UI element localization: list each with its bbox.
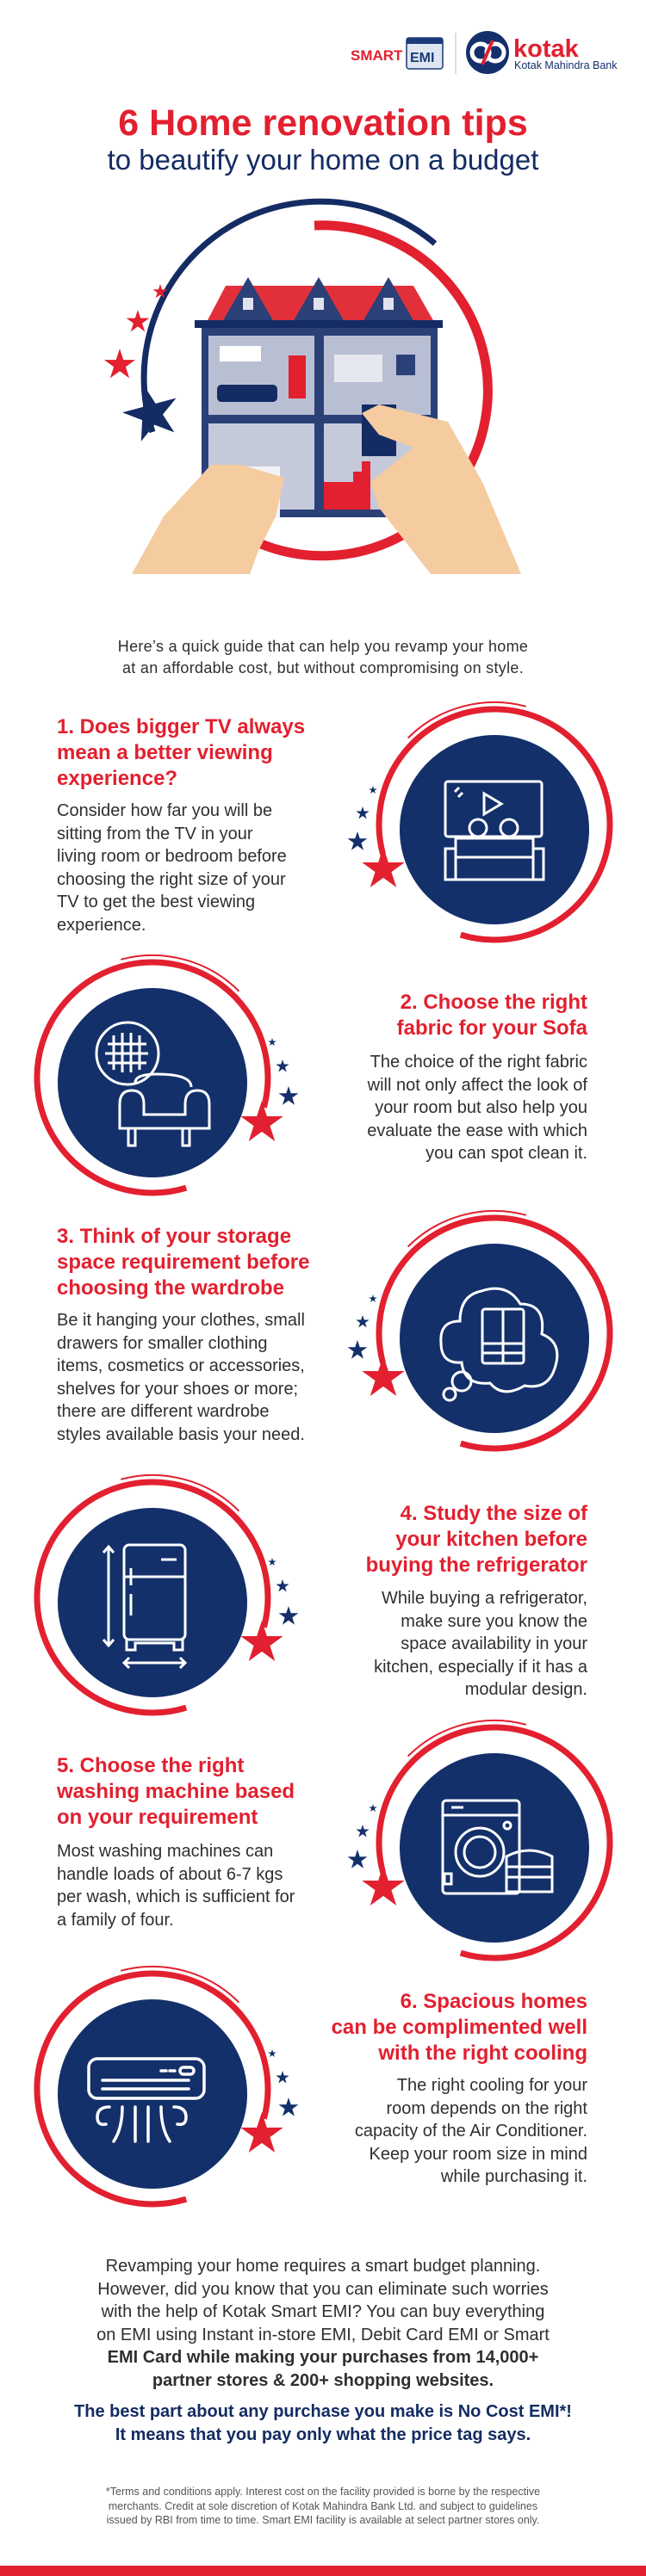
body 6: Keep your room size in mind (370, 2145, 587, 2164)
heading 4: 4. Study the size of (401, 1502, 587, 1525)
body 6 (355, 2076, 587, 2186)
heading 6: 6. Spacious homes (401, 1990, 587, 2013)
no cost emi callout: It means that you pay only what the price tag says. (115, 2425, 531, 2444)
icon 6: air conditioner (37, 1967, 298, 2204)
body 3: styles available basis your need. (57, 1425, 305, 1444)
body 2: your room but also help you (375, 1098, 587, 1117)
body 6: room depends on the right (386, 2099, 587, 2118)
heading 3 (57, 1225, 309, 1300)
intro text: at an affordable cost, but without compromising on style. (122, 659, 524, 676)
body 3: there are different wardrobe (57, 1402, 269, 1421)
body 1 (57, 801, 287, 935)
icon 4: refrigerator (37, 1475, 298, 1713)
body 1: TV to get the best viewing (57, 893, 255, 911)
body 4: space availability in your (401, 1634, 587, 1653)
body 4: modular design. (465, 1680, 587, 1699)
heading 1 (57, 715, 305, 790)
body 3: items, cosmetics or accessories, (57, 1356, 305, 1375)
logo: kotak mahindra bank: kotak (513, 35, 580, 63)
heading 5: 5. Choose the right (57, 1754, 244, 1777)
icon 5: washing machine (348, 1720, 610, 1958)
no cost emi callout (74, 2402, 572, 2444)
body 1: experience. (57, 916, 146, 935)
title: 6 Home renovation tips (118, 102, 528, 144)
body 2 (367, 1053, 587, 1163)
closing paragraph: Revamping your home requires a smart budget planning. (106, 2257, 540, 2276)
body 1: Consider how far you will be (57, 801, 272, 820)
body 3 (57, 1311, 305, 1444)
hero illustration: house with hands (104, 201, 521, 574)
body 2: The choice of the right fabric (370, 1053, 587, 1072)
bottom red bar (0, 2566, 646, 2576)
heading 4: buying the refrigerator (366, 1554, 587, 1577)
logo: kotak mahindra bank: Kotak Mahindra Bank (514, 59, 618, 71)
body 5: a family of four. (57, 1911, 174, 1930)
logo: smart emi: SMART (351, 47, 403, 64)
closing paragraph: However, did you know that you can eliminate such worries (97, 2279, 549, 2298)
heading 4 (366, 1502, 587, 1577)
intro text: Here’s a quick guide that can help you revamp your home (118, 638, 528, 655)
logo: kotak mahindra bank (456, 31, 618, 74)
body 5: handle loads of about 6-7 kgs (57, 1865, 283, 1884)
heading 2 (397, 991, 587, 1040)
closing paragraph: partner stores & 200+ shopping websites. (152, 2370, 494, 2389)
disclaimer (106, 2486, 540, 2526)
body 3: drawers for smaller clothing (57, 1334, 268, 1353)
body 2: will not only affect the look of (368, 1076, 587, 1095)
heading 5: washing machine based (57, 1780, 295, 1803)
heading 1: 1. Does bigger TV always (57, 715, 305, 738)
icon 2: sofa fabric (37, 955, 298, 1193)
closing paragraph (96, 2257, 550, 2389)
heading 3: space requirement before (57, 1251, 309, 1274)
heading 3: choosing the wardrobe (57, 1276, 284, 1300)
logo: smart emi (351, 38, 443, 69)
body 5: Most washing machines can (57, 1842, 273, 1861)
disclaimer: issued by RBI from time to time. Smart EMI facility is available at select partner stores only. (107, 2514, 539, 2526)
icon 3: wardrobe thought cloud (348, 1211, 610, 1449)
body 4 (374, 1589, 587, 1699)
title: to beautify your home on a budget (108, 144, 538, 176)
heading 4: your kitchen before (395, 1528, 587, 1551)
title (108, 102, 539, 176)
closing paragraph: EMI Card while making your purchases from 14,000+ (108, 2348, 538, 2367)
body 2: you can spot clean it. (425, 1144, 587, 1163)
heading 5 (57, 1754, 295, 1829)
heading 2: fabric for your Sofa (397, 1016, 587, 1040)
no cost emi callout: The best part about any purchase you make is No Cost EMI*! (74, 2402, 572, 2421)
body 1: living room or bedroom before (57, 847, 287, 866)
body 1: sitting from the TV in your (57, 825, 253, 843)
heading 6: can be complimented well (332, 2016, 587, 2039)
body 6: while purchasing it. (441, 2167, 587, 2186)
disclaimer: merchants. Credit at sole discretion of Kotak Mahindra Bank Ltd. and subject to guidelines (109, 2499, 537, 2511)
body 4: make sure you know the (401, 1612, 587, 1631)
body 4: kitchen, especially if it has a (374, 1658, 587, 1677)
body 3: Be it hanging your clothes, small (57, 1311, 305, 1330)
heading 1: experience? (57, 767, 177, 790)
heading 3: 3. Think of your storage (57, 1225, 291, 1248)
heading 6 (332, 1990, 587, 2065)
heading 1: mean a better viewing (57, 741, 273, 764)
heading 6: with the right cooling (378, 2042, 587, 2065)
body 3: shelves for your shoes or more; (57, 1380, 298, 1399)
body 6: capacity of the Air Conditioner. (355, 2122, 587, 2140)
closing paragraph: on EMI using Instant in-store EMI, Debit Card EMI or Smart (96, 2326, 550, 2344)
closing paragraph: with the help of Kotak Smart EMI? You can buy everything (102, 2302, 544, 2321)
body 5: per wash, which is sufficient for (57, 1887, 295, 1906)
body 2: evaluate the ease with which (367, 1121, 587, 1140)
disclaimer: *Terms and conditions apply. Interest cost on the facility provided is borne by the respective (106, 2486, 540, 2498)
body 5 (57, 1842, 295, 1930)
body 6: The right cooling for your (397, 2076, 587, 2095)
body 1: choosing the right size of your (57, 870, 286, 889)
intro text (118, 638, 528, 676)
heading 5: on your requirement (57, 1806, 258, 1829)
heading 2: 2. Choose the right (401, 991, 587, 1014)
body 4: While buying a refrigerator, (382, 1589, 587, 1608)
icon 1: tv (348, 702, 610, 940)
logo: smart emi: EMI (410, 51, 434, 65)
